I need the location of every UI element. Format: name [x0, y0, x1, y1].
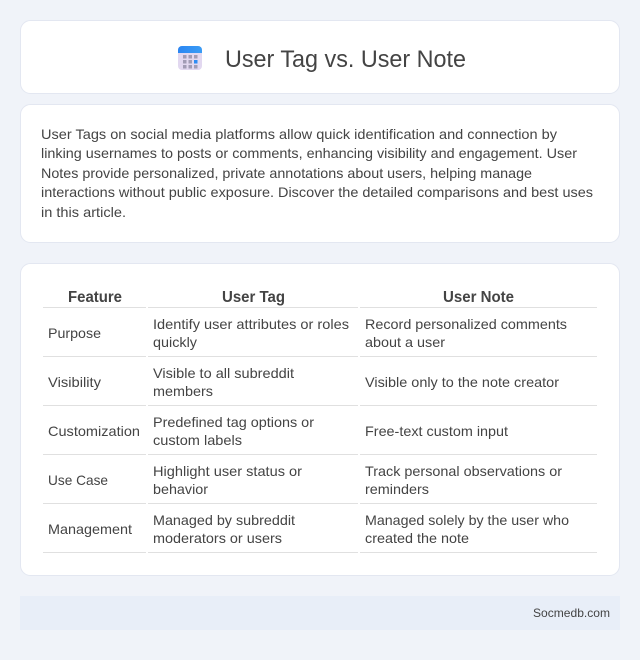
row: Purpose: Identify user attributes or roles: [153, 316, 349, 332]
row: Purpose: about a user: [365, 334, 445, 350]
description text: Notes provide personalized, private annotations about users, helping manage: [41, 165, 532, 181]
row: Visibility: members: [153, 383, 213, 399]
description text: interactions without public exposure. Discover the detailed comparisons and best uses: [41, 184, 593, 200]
footer bar: [20, 596, 620, 630]
icon: calendar: [178, 46, 202, 70]
table header: User Note: [443, 289, 514, 306]
table header: [68, 289, 514, 306]
row: Visibility: Visible to all subreddit: [153, 365, 294, 381]
description text: linking usernames to posts or comments, enhancing visibility and engagement. User: [41, 145, 577, 161]
row: Customization: Free-text custom input: [365, 423, 508, 439]
row: Use Case: reminders: [365, 481, 429, 497]
footer credit: Socmedb.com: [533, 606, 610, 620]
panel: title card: [20, 20, 620, 94]
row: Visibility: Visibility: [48, 374, 101, 390]
row: Management: [48, 512, 569, 546]
row: Management: Managed solely by the user who: [365, 512, 569, 528]
row: Use Case: behavior: [153, 481, 208, 497]
row: Customization: Customization: [48, 423, 140, 439]
row: Management: Management: [48, 521, 132, 537]
row: Management: created the note: [365, 530, 469, 546]
table header: Feature: [68, 289, 122, 306]
row: Management: moderators or users: [153, 530, 282, 546]
description text: User Tags on social media platforms allow quick identification and connection by: [41, 126, 557, 142]
panel: comparison table: [20, 264, 620, 576]
row: Management: Managed by subreddit: [153, 512, 295, 528]
row: Customization: [48, 414, 508, 448]
row: Use Case: Use Case: [48, 472, 108, 488]
row: Purpose: quickly: [153, 334, 197, 350]
description text: in this article.: [41, 204, 126, 220]
row: Customization: custom labels: [153, 432, 242, 448]
row: Customization: Predefined tag options or: [153, 414, 314, 430]
description text: [41, 126, 593, 220]
row: Use Case: [48, 463, 562, 497]
table header: User Tag: [222, 289, 285, 306]
row: Purpose: Record personalized comments: [365, 316, 567, 332]
row: Purpose: [48, 316, 567, 350]
row: Visibility: Visible only to the note creator: [365, 374, 559, 390]
title: User Tag vs. User Note: [225, 46, 466, 73]
row: Use Case: Highlight user status or: [153, 463, 302, 479]
row: Use Case: Track personal observations or: [365, 463, 562, 479]
panel: description: [20, 104, 620, 242]
row: Purpose: Purpose: [48, 325, 101, 341]
row: Visibility: [48, 365, 559, 399]
